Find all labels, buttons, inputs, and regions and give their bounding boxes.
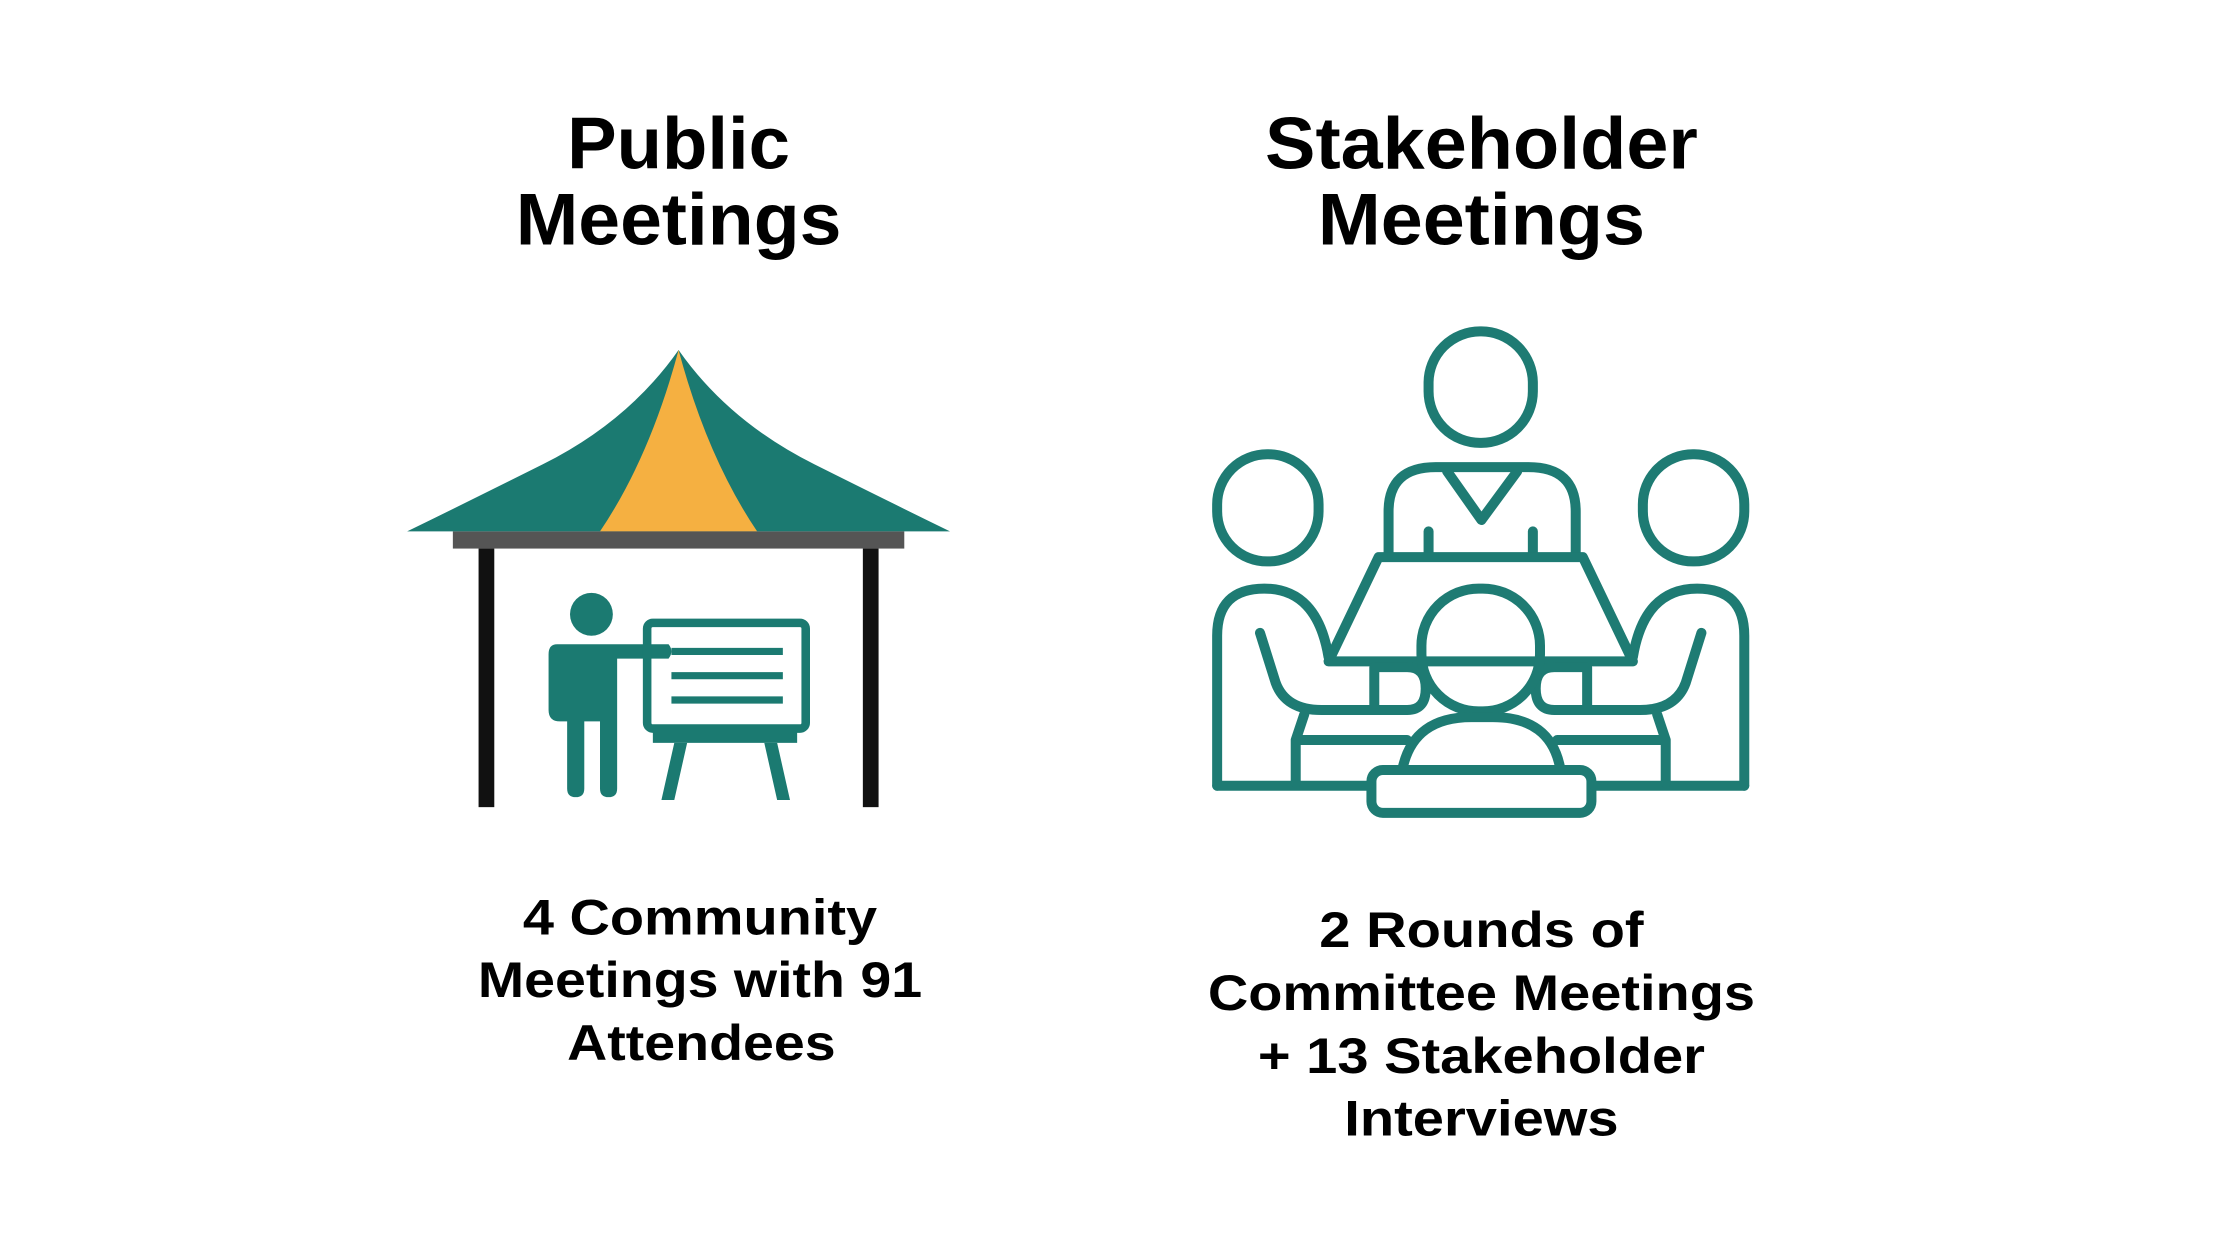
text: public meetings stats: Attendees xyxy=(567,1015,836,1071)
title: Public Meetings xyxy=(516,104,841,260)
text: stakeholder meetings stats: Committee Meetings xyxy=(1208,965,1755,1021)
text: stakeholder meetings stats: Interviews xyxy=(1344,1091,1619,1147)
title: Stakeholder Meetings xyxy=(1265,104,1698,260)
text: public meetings stats xyxy=(478,889,922,1071)
title: Stakeholder Meetings: Meetings xyxy=(1318,179,1645,260)
icon: tent with presenter xyxy=(407,350,950,807)
text: stakeholder meetings stats: 2 Rounds of xyxy=(1319,902,1644,958)
text: stakeholder meetings stats xyxy=(1208,902,1755,1147)
title: Public Meetings: Meetings xyxy=(516,179,841,260)
text: public meetings stats: 4 Community xyxy=(523,889,877,945)
text: public meetings stats: Meetings with 91 xyxy=(478,952,922,1008)
title: Stakeholder Meetings: Stakeholder xyxy=(1265,104,1698,185)
title: Public Meetings: Public xyxy=(567,104,790,185)
text: stakeholder meetings stats: + 13 Stakeholder xyxy=(1258,1028,1705,1084)
icon: stakeholder meeting xyxy=(1217,331,1744,813)
